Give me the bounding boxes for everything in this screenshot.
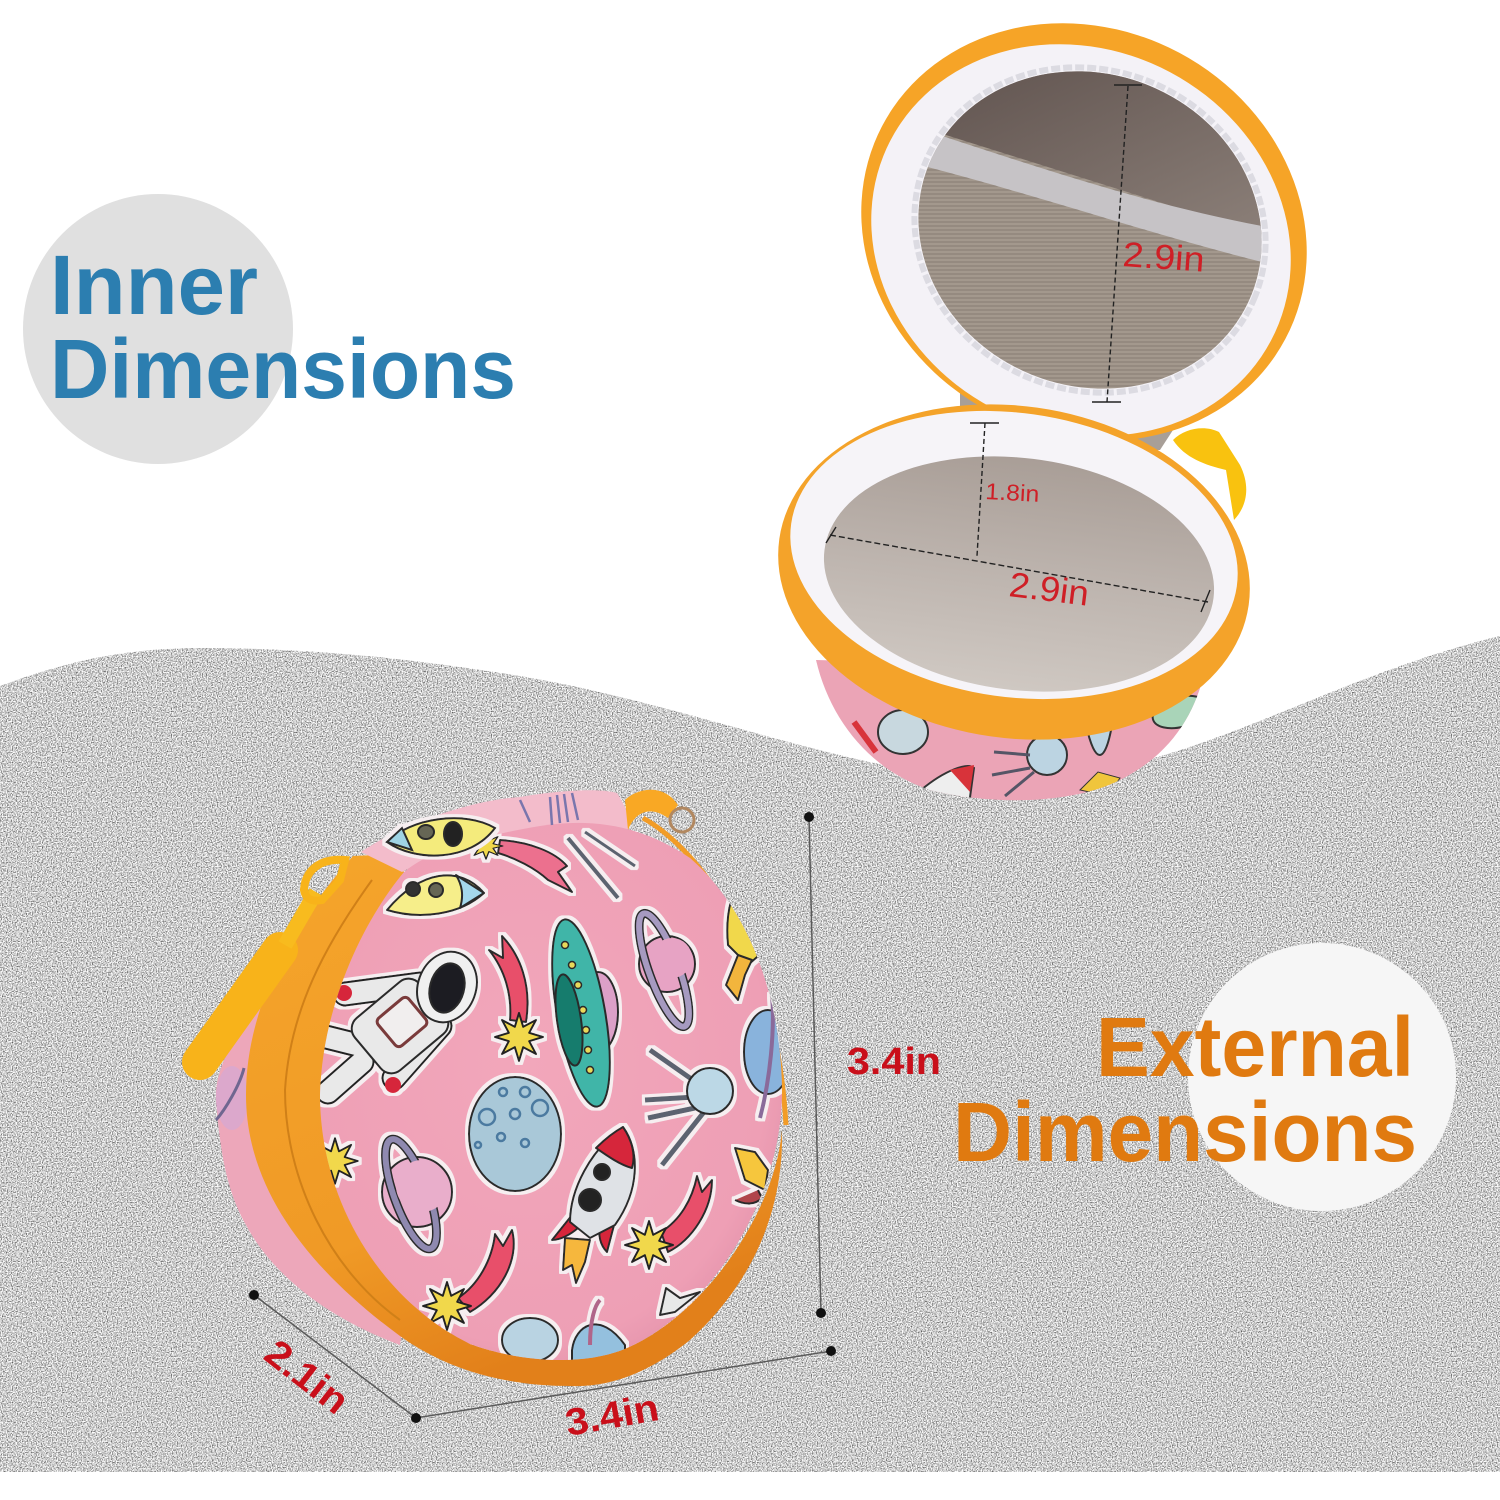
open case photo: inner dimensions [756,0,1381,812]
icon: comet left [489,936,543,1061]
printed space icons [312,832,792,1370]
inner measurement lines [826,85,1210,612]
heading: Inner Dimensions [50,238,516,416]
yellow zipper pull [200,860,345,1062]
white circle behind External Dimensions [1188,943,1456,1211]
lid: stitched edge [865,15,1315,445]
icon: comet bottom [423,1230,514,1330]
grey circle behind Inner Dimensions [23,194,293,464]
icon: comet right [625,1176,712,1269]
lid: white lining ring [802,0,1360,509]
pink front face [320,823,782,1360]
icon: flames right [735,1148,768,1204]
top printed binding [361,790,629,872]
heading: External Dimensions: Dimensions [953,1085,1417,1179]
top stripes on binding [520,793,578,825]
label: depth 2.1in: 2.1in [256,1332,356,1423]
bowl: printed icons [852,694,1198,798]
label: diameter 2.9in: 2.9in [1007,565,1091,614]
zipper pull on hinge [1173,428,1246,520]
heading: External Dimensions [953,1000,1417,1179]
speckled grey wave background [0,636,1500,1472]
lid: orange zipper rim [787,0,1381,518]
icon: yellow rocket right [726,890,765,1000]
icon: yellow rocket top [387,875,484,915]
orange tab at top with metal ring [625,790,694,832]
lid: zipper strip of mesh pocket [920,132,1262,262]
external measurement lines [249,812,836,1423]
right rim zipper [643,818,786,1125]
heading: External Dimensions: External [1096,1000,1414,1094]
icon: astronaut [322,943,487,1093]
icon: blue planet right [744,995,792,1118]
icon: ufo [541,915,621,1111]
closed case photo: external dimensions [200,790,792,1386]
zipper centre seam [285,880,400,1320]
label: lid depth 2.9in: 2.9in [1121,235,1206,280]
heading: Inner Dimensions: Dimensions [50,322,516,416]
icon: sputnik [645,1050,733,1165]
icon: planet lower [375,1134,452,1254]
alien on top binding [387,818,495,856]
icon: bottom planets [502,1300,625,1370]
icon: white rocket [552,1127,635,1283]
back shell planet [216,1066,248,1130]
icon: planet upper [629,908,699,1032]
orange zipper band [246,854,782,1386]
label: height 1.8in: 1.8in [985,478,1040,507]
bowl: printed pink shell [816,660,1205,800]
bowl: orange zipper rim [756,375,1272,769]
back shell [216,950,420,1345]
bowl: white lining ring [771,383,1257,727]
icon: moon [469,1077,561,1191]
icon: comet top [469,833,572,892]
heading: Inner Dimensions: Inner [50,238,258,332]
icon: white wing bottom [660,1288,700,1315]
label: height 3.4in: 3.4in [847,1041,941,1083]
label: width 3.4in: 3.4in [562,1387,662,1445]
plush hinge [960,393,1173,450]
icon: star left [312,1138,358,1184]
icon: satellite top [568,832,635,898]
lid: inner fabric [918,71,1262,389]
bowl: plush interior [810,435,1228,713]
